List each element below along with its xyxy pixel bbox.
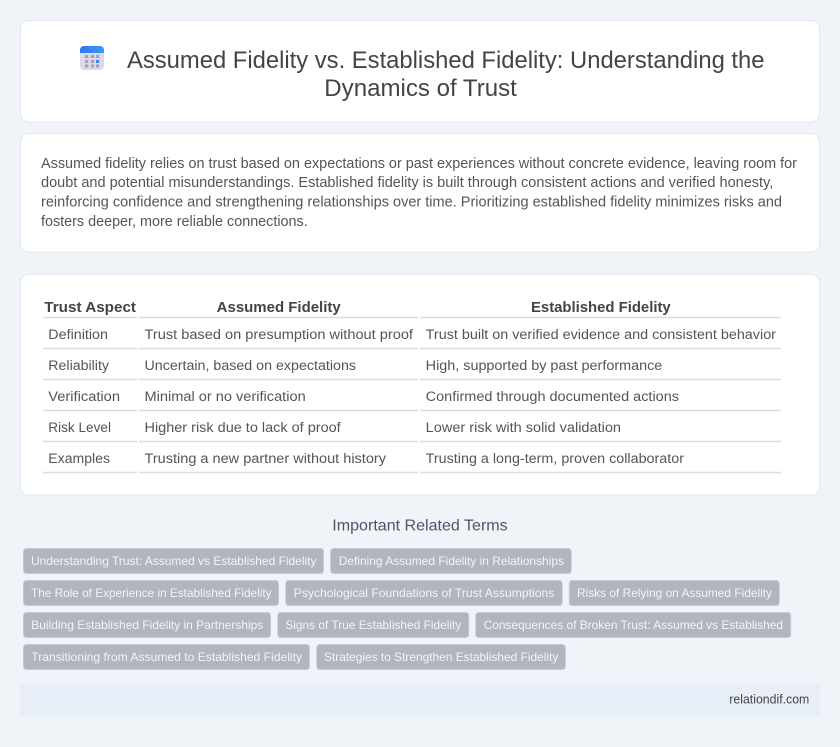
table row: reliability: Uncertain, based on expectations [144,358,356,374]
footer [20,683,820,717]
table header row: Assumed Fidelity [217,300,341,316]
tag [569,580,779,606]
tag [24,612,270,638]
title: Dynamics of Trust [324,75,517,102]
text block: summary paragraph: Assumed fidelity relies on trust based on expectations or past experiences without concrete evidence, leaving room for [41,156,797,172]
table row: examples: Trusting a new partner without history [144,451,387,467]
tag [476,612,791,638]
table row: examples [43,451,781,472]
text block: summary paragraph: reinforcing confidence and strengthening relationships over time. Prioritizing established fidelity minimizes risks and [41,195,782,211]
table header row: Trust Aspect [44,300,136,316]
panel: comparison table [20,274,820,495]
title [127,47,764,102]
tag: Strategies to Strengthen Established Fidelity [324,650,558,664]
table row: reliability [43,358,781,380]
table header row [43,300,781,318]
table row: verification: Confirmed through documented actions [426,389,679,405]
table row: reliability: Reliability [48,358,110,374]
table row: risk level: Higher risk due to lack of proof [144,420,341,436]
tag [24,644,310,670]
tag: Understanding Trust: Assumed vs Established Fidelity [31,554,316,568]
tag list: related terms [24,548,791,670]
text block: summary paragraph: doubt and potential misunderstandings. Established fidelity is built through consistent actions and verified honesty, [41,175,773,191]
tag [24,548,324,574]
tag: Risks of Relying on Assumed Fidelity [577,586,772,600]
tag [24,580,278,606]
tag: Consequences of Broken Trust: Assumed vs Established [484,618,783,632]
table row: definition: Trust built on verified evidence and consistent behavior [426,327,776,343]
table row: risk level [43,420,781,442]
table row: risk level: Lower risk with solid validation [426,420,621,436]
table row: definition [43,327,781,348]
text block: summary paragraph [41,156,797,230]
table row: examples: Trusting a long-term, proven collaborator [426,451,684,467]
tag [286,580,562,606]
tag: Defining Assumed Fidelity in Relationships [339,554,564,568]
panel: summary [20,134,820,252]
title: Assumed Fidelity vs. Established Fidelity: Understanding the [127,47,764,74]
table row: examples: Examples [48,451,110,467]
table row: verification [43,389,781,410]
tag: Building Established Fidelity in Partnerships [31,618,263,632]
tag [278,612,469,638]
table row: verification: Verification [48,389,120,405]
tag: Transitioning from Assumed to Established Fidelity [31,650,302,664]
footer: relationdif.com [729,692,809,707]
tag: The Role of Experience in Established Fidelity [31,586,272,600]
table row: reliability: High, supported by past performance [426,358,662,374]
table header row: Established Fidelity [531,300,671,316]
table row: definition: Trust based on presumption without proof [144,327,413,343]
table row: definition: Definition [48,327,108,343]
text block: summary paragraph: fosters deeper, more reliable connections. [41,214,308,230]
tag: Psychological Foundations of Trust Assumptions [294,586,554,600]
table row: verification: Minimal or no verification [144,389,306,405]
tag [331,548,571,574]
tag: Signs of True Established Fidelity [285,618,461,632]
panel: header [20,20,820,122]
table row: risk level: Risk Level [48,420,111,436]
heading: related terms: Important Related Terms [332,518,508,535]
icon: calendar [80,46,104,70]
tag [317,644,565,670]
